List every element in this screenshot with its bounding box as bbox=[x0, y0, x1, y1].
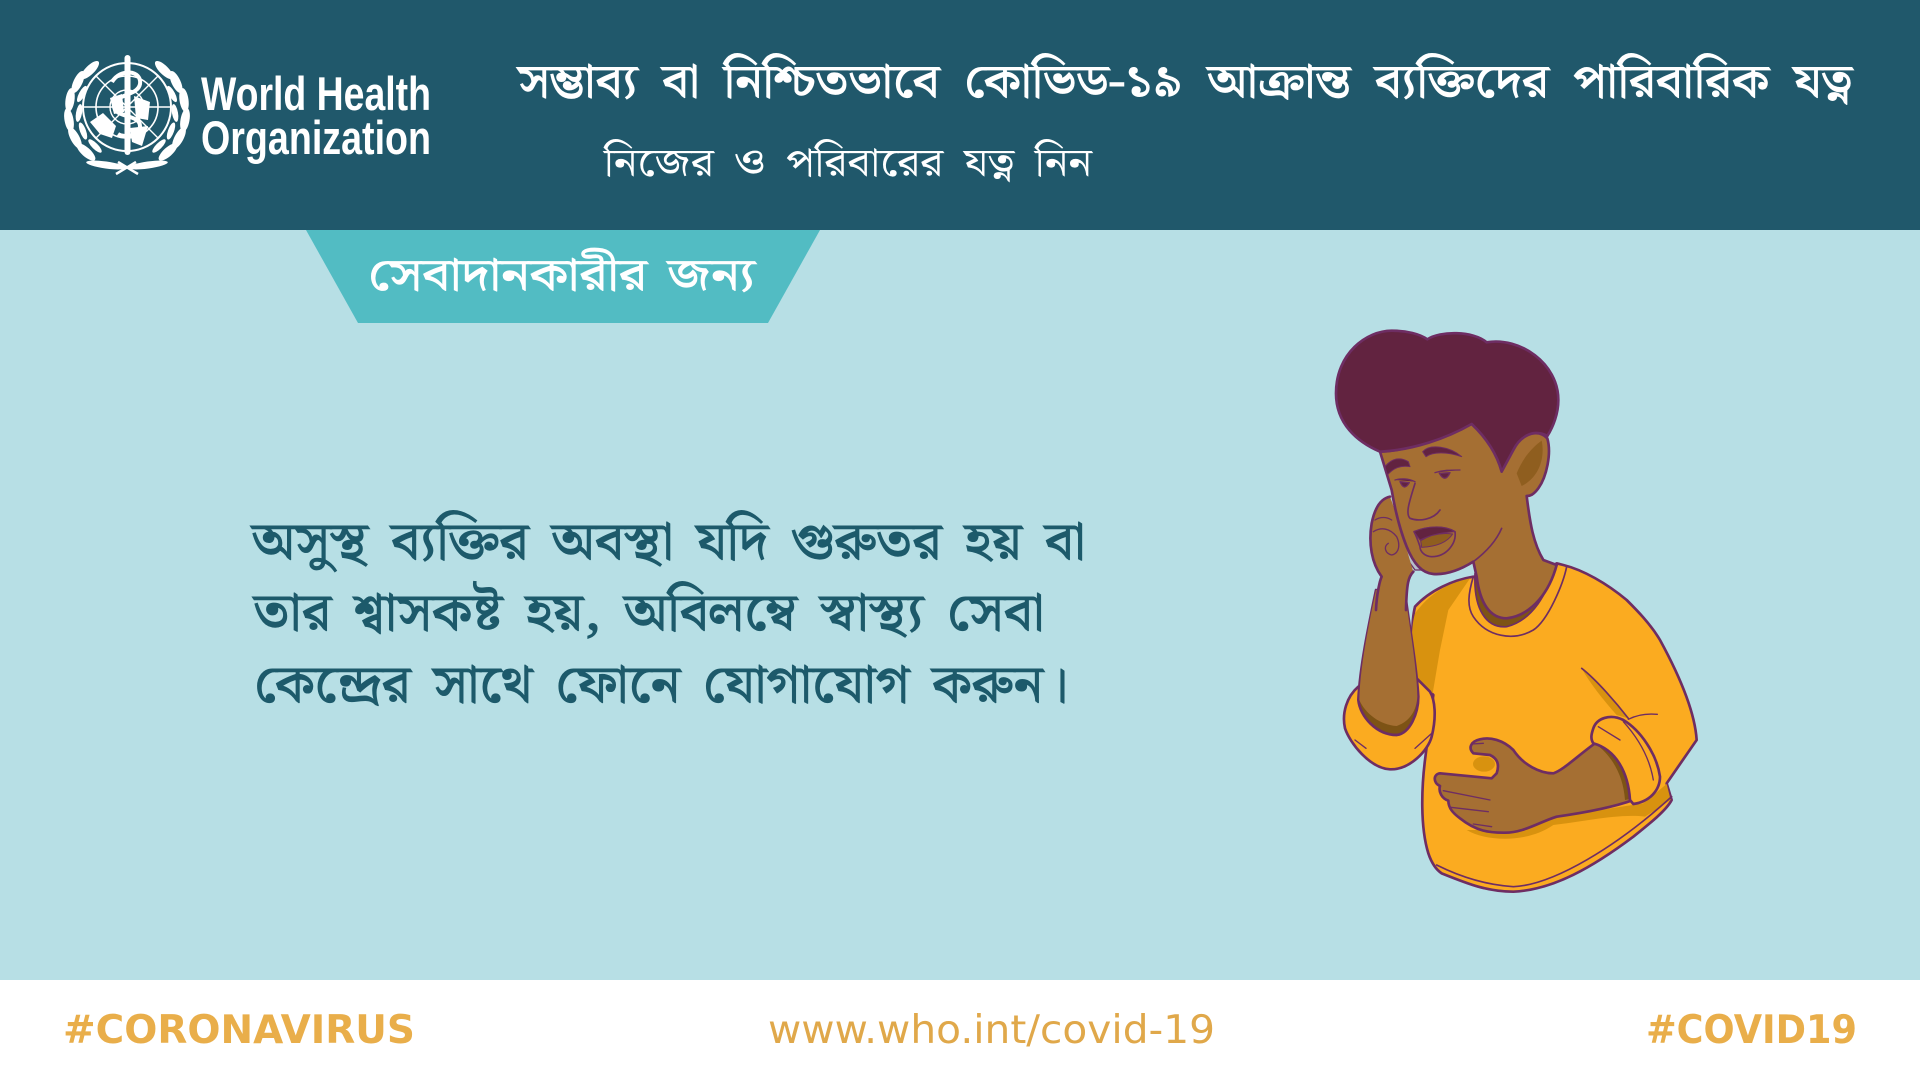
WHO logo bbox=[62, 55, 431, 174]
audience tab bbox=[306, 230, 820, 323]
main message bbox=[250, 501, 1085, 729]
main message: তার শ্বাসকষ্ট হয়, অবিলম্বে স্বাস্থ্য সেবা bbox=[252, 572, 1044, 657]
hair bbox=[1336, 331, 1558, 472]
hand holding phone bbox=[1402, 545, 1423, 570]
illustration: man on phone holding stomach bbox=[1336, 331, 1697, 892]
facial features bbox=[1385, 447, 1462, 475]
main message: অসুস্থ ব্যক্তির অবস্থা যদি গুরুতর হয় বা bbox=[250, 501, 1085, 586]
logo wordmark: Organization bbox=[201, 111, 431, 164]
logo wordmark bbox=[201, 67, 431, 164]
sweater and arms bbox=[1344, 563, 1697, 892]
icon: WHO emblem bbox=[62, 55, 192, 174]
website url: www.who.int/covid-19 bbox=[768, 1008, 1215, 1053]
subtitle: নিজের ও পরিবারের যত্ন নিন bbox=[602, 133, 1094, 197]
face and neck bbox=[1380, 410, 1557, 618]
title: সম্ভাব্য বা নিশ্চিতভাবে কোভিড-১৯ আক্রান্ত ব্যক্তিদের পারিবারিক যত্ন bbox=[516, 46, 1854, 121]
head bbox=[1336, 331, 1558, 618]
footer band bbox=[0, 980, 1920, 1080]
header band bbox=[0, 0, 1920, 230]
tab label: সেবাদানকারীর জন্য bbox=[368, 241, 757, 314]
hashtag coronavirus: #CORONAVIRUS bbox=[63, 1008, 415, 1053]
hashtag covid19: #COVID19 bbox=[1646, 1008, 1857, 1053]
logo wordmark: World Health bbox=[201, 67, 431, 120]
main message: কেন্দ্রের সাথে ফোনে যোগাযোগ করুন। bbox=[254, 644, 1069, 729]
